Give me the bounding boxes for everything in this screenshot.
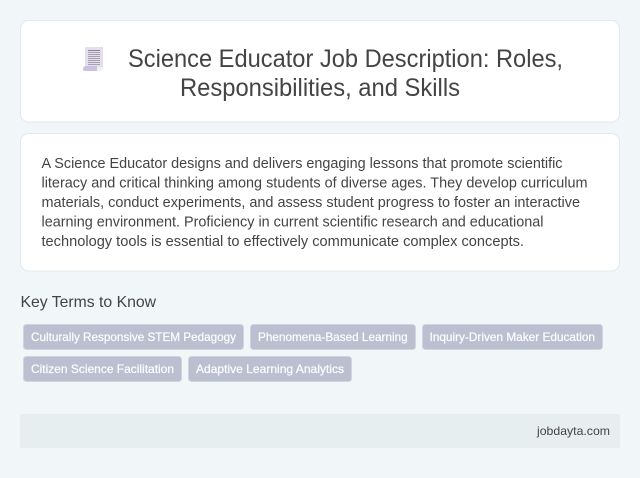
pill: Culturally Responsive STEM Pedagogy bbox=[24, 324, 244, 350]
pill: Citizen Science Facilitation bbox=[24, 356, 182, 382]
pill: Adaptive Learning Analytics: Adaptive Learning Analytics bbox=[196, 362, 344, 376]
pill: Inquiry-Driven Maker Education bbox=[422, 324, 602, 350]
pill: Culturally Responsive STEM Pedagogy: Culturally Responsive STEM Pedagogy bbox=[31, 330, 236, 344]
icon: document scroll bbox=[83, 47, 103, 71]
description text: A Science Educator designs and delivers engaging lessons that promote scientific bbox=[42, 156, 562, 172]
title: Responsibilities, and Skills bbox=[180, 74, 460, 102]
pill: Adaptive Learning Analytics bbox=[188, 356, 352, 382]
pill: Inquiry-Driven Maker Education: Inquiry-Driven Maker Education bbox=[430, 330, 595, 344]
title: Science Educator Job Description: Roles, bbox=[128, 45, 563, 73]
panel: header bbox=[20, 20, 620, 122]
description text bbox=[42, 156, 588, 250]
footer bbox=[20, 414, 620, 448]
description text: technology tools is essential to effectively communicate complex concepts. bbox=[42, 234, 524, 250]
description text: learning environment. Proficiency in current scientific research and educational bbox=[42, 214, 544, 230]
heading: key terms: Key Terms to Know bbox=[20, 294, 156, 311]
panel: description bbox=[20, 134, 620, 271]
description text: literacy and critical thinking among students of diverse ages. They develop curriculum bbox=[42, 176, 588, 192]
pill: Phenomena-Based Learning bbox=[250, 324, 416, 350]
pill: Citizen Science Facilitation: Citizen Science Facilitation bbox=[31, 362, 174, 376]
title bbox=[128, 45, 563, 102]
pill: Phenomena-Based Learning: Phenomena-Based Learning bbox=[258, 330, 408, 344]
description text: materials, conduct experiments, and assess student progress to foster an interactive bbox=[42, 195, 580, 211]
footer: jobdayta.com bbox=[536, 424, 610, 438]
